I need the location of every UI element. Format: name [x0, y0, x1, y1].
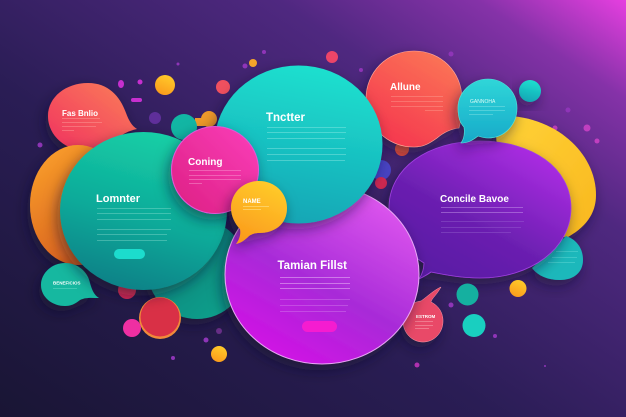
- decorative circles: lower right: [456, 280, 526, 337]
- bubble: cyan GANNOHA: GANNOHA: [470, 99, 496, 105]
- bubble: purple Concile Bavoe: Concile Bavoe: [440, 194, 509, 205]
- bubble: red Allune: [366, 51, 462, 147]
- bubble: turquoise Tnctter: [214, 66, 382, 224]
- bubble: pink Coning: Coning: [188, 157, 222, 168]
- bubble: magenta Tamian Fillst: [225, 185, 419, 364]
- bubble: small teal left: BENEFICIOS: [53, 280, 81, 286]
- decorative circles: lower left: [118, 281, 227, 362]
- bubble: coral Fas Bnlio: Fas Bnlio: [62, 109, 98, 118]
- bubble: dark teal back: [147, 219, 247, 319]
- bubble: turquoise Tnctter: Tnctter: [266, 112, 306, 124]
- bubble: teal Lomnter: [60, 132, 227, 290]
- bubble: teal Lomnter: Lomnter: [96, 193, 141, 205]
- bubble: small teal left: [41, 263, 99, 306]
- bubble: small teal and orange behind: [171, 111, 217, 140]
- bubble: yellow NAME: [231, 181, 287, 244]
- decorative circles behind right bubbles: [371, 142, 409, 189]
- bubble: teal lower right: [532, 236, 583, 280]
- bubble: cyan GANNOHA: [458, 79, 517, 143]
- bubble: purple Concile Bavoe: [389, 141, 571, 279]
- bubble: magenta Tamian Fillst: Tamian Fillst: [278, 260, 347, 272]
- bubble: coral Fas Bnlio: [48, 83, 137, 151]
- bubble: red Allune: Allune: [390, 82, 421, 93]
- decorative circles: top left: [155, 51, 338, 95]
- bubble: red small: [403, 287, 443, 342]
- bubble: orange back: [30, 145, 126, 265]
- decorative confetti dots: [38, 50, 600, 368]
- decorative circle: turquoise top right: [519, 80, 541, 102]
- bubble: yellow NAME: NAME: [243, 199, 261, 205]
- bubble: red small: ESTROM: [416, 314, 436, 319]
- bubble: yellow right back: [495, 116, 596, 238]
- bubble: pink Coning: [172, 126, 258, 214]
